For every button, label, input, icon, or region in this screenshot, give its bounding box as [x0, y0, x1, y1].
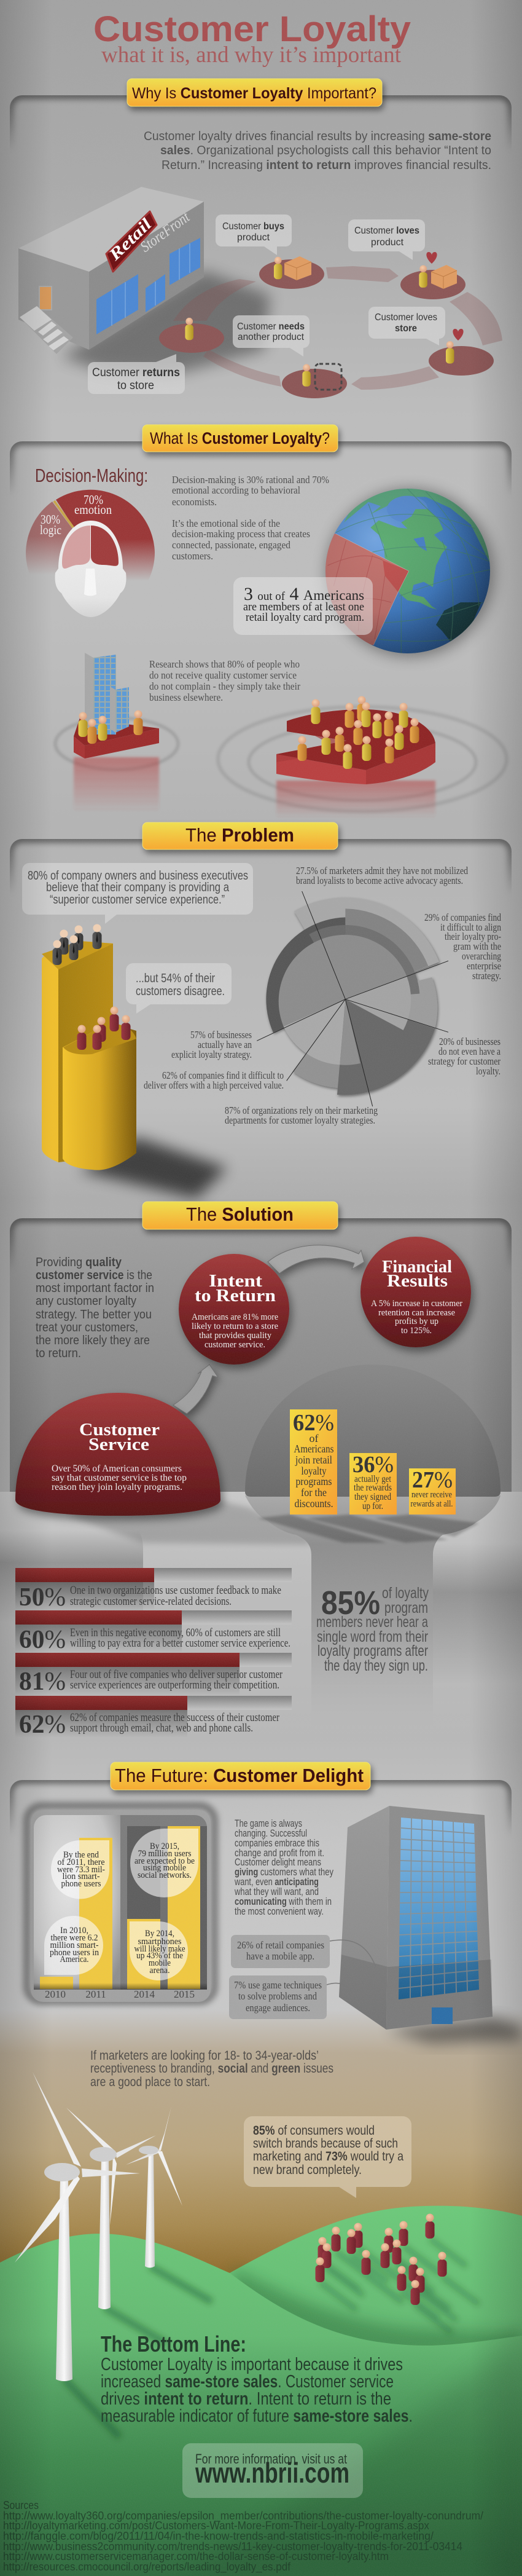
bar: 2011: [79, 1838, 112, 1989]
row: 81 percent: service experiences are outperforming their competition.: [70, 1679, 279, 1692]
panel: the problem frame: [10, 839, 512, 888]
bubble: 2014: will likely make: [134, 1944, 185, 1954]
text: the game is always changing: Customer delight means: [235, 1857, 321, 1868]
circle: financial results: Financial: [382, 1258, 452, 1277]
subtitle: what it is, and why it’s important: [101, 42, 402, 68]
bar: 27 percent: 27%: [412, 1467, 453, 1493]
speech bubble: customer loves store: Customer loves: [375, 312, 437, 323]
text: the game is always changing: changing. Successful: [235, 1828, 307, 1839]
people: [53, 924, 130, 1050]
circle: financial results: profits by up: [395, 1317, 438, 1326]
text: radial chart labels: loyalty.: [476, 1065, 501, 1077]
row: 81 percent: Four out of five companies who deliver superior customer: [70, 1669, 282, 1681]
illustration: crowd on hill: [316, 2214, 479, 2333]
illustration: small pie slice with building: [55, 653, 178, 813]
text: if marketers are looking: receptiveness to branding, social and green issues: [90, 2061, 333, 2076]
bubble: 2010: million smart-: [50, 1940, 99, 1950]
callout: 7 percent game techniques: to solve problems and: [238, 1990, 317, 2002]
speech bubble: 80 percent of owners: “superior customer service experience.”: [50, 893, 225, 907]
text: sources: http://www.customerservicemanager.com/the-dollar-sense-of-customer-loyalty.htm: [3, 2550, 389, 2562]
circle: intent to return: to Return: [195, 1286, 276, 1306]
callout: 3 out of 4 americans: 3 out of 4 Americans: [244, 584, 364, 604]
circle: intent to return: Intent: [209, 1272, 263, 1291]
intro text: Customer loyalty drives financial results by increasing same-store: [144, 130, 491, 143]
axis labels: 2011: [85, 1988, 106, 2000]
title: Customer Loyalty: [93, 9, 411, 49]
illustration: wind turbines: [15, 2072, 212, 2437]
bubble: 2015: By 2015,: [150, 1841, 179, 1851]
callout: 26 percent mobile app: [231, 1935, 376, 1968]
stat: 85 percent of loyalty members: the day they sign up.: [324, 1657, 428, 1674]
row: 50 percent: strategic customer service-related decisions.: [70, 1596, 232, 1608]
bubble: 2010: America.: [60, 1955, 88, 1964]
text: sources: http://www.business2community.com/trends-news/11-key-customer-loyalty-trends-for-2011-03414: [3, 2540, 462, 2553]
text: the bottom line: [101, 2331, 413, 2426]
callout: 7 percent game techniques: engage audiences.: [246, 2002, 310, 2014]
cycle diagram: retail store and customer loop: [18, 187, 502, 398]
text: decision making explanation: customers.: [172, 550, 213, 562]
text: the game is always changing: companies embrace this: [235, 1838, 319, 1849]
icon: retail store building: Retail: [104, 215, 155, 264]
icon: loop arrows: [173, 266, 502, 390]
map: north america: [370, 509, 447, 610]
text: radial chart labels: enterprise: [467, 960, 501, 972]
bar: 27 percent: rewards at all.: [410, 1499, 453, 1509]
icon: retail store building: [18, 187, 204, 354]
keyhole shaped recess: [245, 1365, 501, 1743]
stat: 85 percent of loyalty members: single word from their: [317, 1628, 428, 1645]
bar: 2010: [40, 1977, 73, 1989]
row: 62 percent: 62% of companies measure the success of their customer: [70, 1712, 279, 1724]
speech bubble: 85 percent would switch: switch brands because of such: [253, 2137, 398, 2151]
banner: the solution: The Solution: [186, 1203, 294, 1225]
bar: 62 percent: Americans: [294, 1443, 334, 1455]
speech bubble: customer needs another product: another product: [238, 332, 305, 342]
text: the game is always changing: change and profit from it.: [235, 1848, 324, 1859]
speech bubble: 85 percent would switch: 85% of consumers would: [253, 2124, 375, 2138]
pie labels: [40, 492, 112, 537]
text: sources: Sources: [3, 2499, 39, 2511]
text: radial chart labels: do not even have a: [438, 1046, 501, 1057]
bar: 27 percent: [409, 1467, 456, 1514]
speech bubble: customer buys product: Customer buys: [222, 221, 284, 232]
callout: 3 out of 4 americans: retail loyalty card program.: [246, 611, 364, 624]
text: the game is always changing: comunicating with them in: [235, 1896, 332, 1907]
row: 50 percent: One in two organizations use customer feedback to make: [70, 1585, 281, 1597]
text: decision making explanation: Decision-making is 30% rational and 70%: [172, 474, 329, 486]
bubble: 2014: smartphones: [138, 1937, 182, 1947]
text: decision making explanation: decision-making process that creates: [172, 528, 310, 540]
wedge: 27.5 percent: [294, 897, 439, 999]
text: radial chart labels: overarching: [462, 950, 501, 962]
bubble: 2014: up 43% of the: [136, 1951, 183, 1961]
text: sources: http://www.loyalty360.org/companies/epsilon_member/contributions/the-customer-loyalty-conundrum/: [3, 2510, 483, 2523]
frame shadow: [27, 1806, 214, 2001]
axis labels: 2014: [134, 1988, 155, 2000]
wedge: 57 percent: [266, 917, 345, 1033]
text: sources: [3, 2499, 483, 2574]
title: [93, 9, 411, 68]
bar: 62 percent: loyalty: [301, 1465, 327, 1477]
speech bubble: but 54 percent disagree: ...but 54% of their: [136, 972, 215, 985]
bar: 62 percent: [290, 1409, 337, 1514]
banner: the problem: [142, 822, 338, 849]
text: providing quality customer service: [36, 1255, 154, 1360]
text: providing quality customer service: Providing quality: [36, 1255, 122, 1269]
axis labels: 2015: [174, 1988, 195, 2000]
icon: boxes, hearts and dashed placeholder: [284, 252, 464, 390]
text: the bottom line: increased same-store sales. Customer service: [101, 2372, 394, 2392]
text: the game is always changing: The game is always: [235, 1818, 302, 1829]
banner: why is customer loyalty important: [127, 79, 382, 106]
text: radial chart labels: strategy for customer: [428, 1055, 501, 1067]
bar: 36 percent: [349, 1452, 397, 1514]
text: sources: http://loyaltymarketing.com/post/Customers-Want-More-From-Their-Loyalty-Programs.aspx: [3, 2519, 429, 2532]
text: radial chart labels: 20% of businesses: [439, 1036, 501, 1047]
bubble: 2011: phone users: [61, 1879, 101, 1889]
circle: financial results: A 5% increase in customer: [371, 1299, 462, 1309]
bubble: 2010: there were 6.2: [50, 1933, 98, 1943]
icon: customer figures: [185, 257, 454, 387]
bubble: 2014: By 2014,: [145, 1929, 174, 1939]
bubble: 2015: are expected to be: [134, 1856, 195, 1866]
dome: customer service: Over 50% of American consumers: [52, 1463, 182, 1474]
text: decision making explanation: [172, 474, 329, 562]
text: decision making explanation: connected, passionate, engaged: [172, 539, 290, 551]
text: research shows: do not complain - they simply take their: [149, 680, 300, 692]
chart: decision making pie and head: [26, 465, 155, 617]
arrow: customer service to intent: [173, 1365, 218, 1414]
illustration: yellow cylinder bars with people: [42, 924, 227, 1199]
circle: intent to return: that provides quality: [199, 1331, 272, 1341]
text: radial chart labels: departments for customer loyalty strategies.: [225, 1114, 375, 1126]
circle: financial results: Results: [387, 1272, 448, 1291]
text: sources: http://resources.cmocouncil.org/reports/leading_loyalty_es.pdf: [3, 2561, 291, 2574]
text: radial chart labels: it difficult to align: [440, 921, 501, 933]
map: hudson bay: [413, 537, 427, 551]
chart: radial loyalty statistics: [257, 891, 448, 1106]
speech bubble: customer loves product: Customer loves: [354, 226, 419, 236]
text: decision making explanation: emotional according to behavioral: [172, 484, 300, 496]
turbine 3: [126, 2106, 182, 2268]
bubble: 2011: By the end: [63, 1850, 99, 1860]
banner: the future customer delight: The Future: Customer Delight: [115, 1765, 364, 1786]
text: the game is always changing: giving customers what they: [235, 1867, 334, 1878]
dome: customer service: Service: [88, 1435, 149, 1454]
chart background dark half: [120, 1815, 207, 1990]
call to action: website: [182, 2443, 363, 2498]
banner: the solution: [142, 1202, 338, 1229]
text: research shows: do not receive quality customer service: [149, 669, 297, 681]
bar: 62 percent: 62%: [293, 1410, 334, 1436]
icon: retail store building: StoreFront: [138, 208, 193, 256]
text: if marketers are looking: are a good place to start.: [90, 2074, 210, 2089]
speech bubble: customer loves store: [368, 307, 445, 345]
speech bubble: 85 percent would switch: [244, 2116, 411, 2198]
wedge: 62 percent: [293, 999, 345, 1088]
text: radial chart labels: explicit loyalty strategy.: [171, 1049, 252, 1060]
speech bubble: customer returns to store: to store: [117, 379, 154, 392]
row: 60 percent: 60%: [19, 1626, 66, 1654]
stat: 85 percent of loyalty members: program: [384, 1599, 428, 1617]
tall bar: [42, 941, 113, 1162]
row: 50 percent: 50%: [19, 1583, 66, 1612]
text: radial chart labels: brand loyalists to become active advocacy agents.: [296, 875, 463, 886]
intro text: Return.” Increasing intent to return improves financial results.: [162, 159, 491, 172]
floor shadows under solution section: [0, 1501, 522, 1684]
text: radial chart labels: strategy.: [472, 970, 501, 982]
row: 62 percent: support through email, chat, web and phone calls.: [70, 1722, 253, 1735]
turbine 1: [15, 2072, 140, 2381]
circle: financial results: to 125%.: [401, 1326, 432, 1336]
speech bubble: customer loves product: [348, 219, 425, 260]
speech bubble: customer needs another product: Customer needs: [237, 321, 305, 332]
bar: 62 percent: discounts.: [295, 1497, 333, 1510]
row: 62 percent: 62%: [19, 1711, 66, 1739]
bubble: 2011: [51, 1840, 109, 1899]
callout: 26 percent mobile app: have a mobile app.: [246, 1950, 314, 1962]
bubble: 2011: of 2011, there: [58, 1857, 104, 1867]
illustration: green hills: [0, 2206, 522, 2576]
speech bubble: but 54 percent disagree: customers disagree.: [136, 985, 225, 998]
text: if marketers are looking: If marketers are looking for 18- to 34-year-olds’: [90, 2048, 319, 2063]
row: 50 percent: [15, 1568, 292, 1612]
progress bars: customer service statistics: [15, 1568, 292, 1739]
bar: 62 percent: programs: [296, 1475, 332, 1487]
speech bubble: customer buys product: product: [237, 232, 270, 243]
callout: 3 out of 4 americans: are members of at least one: [243, 601, 364, 613]
icon: head mask with brain: [55, 521, 127, 617]
dome: customer service: reason they join loyalty programs.: [52, 1482, 182, 1492]
row: 62 percent: [15, 1696, 292, 1739]
bar: 36 percent: they signed: [354, 1492, 391, 1502]
wedge: 20 percent: [337, 999, 435, 1095]
stat: 85 percent of loyalty members: loyalty programs after: [317, 1642, 428, 1660]
bubble: 2015: using mobile: [143, 1863, 186, 1873]
circle: intent to return: [179, 1254, 289, 1365]
text: radial chart labels: gram with the: [453, 940, 501, 952]
text: radial chart labels: deliver offers with a high perceived value.: [144, 1079, 284, 1091]
text: providing quality customer service: customer service is the: [36, 1268, 152, 1282]
speech bubble: 85 percent would switch: new brand completely.: [253, 2163, 362, 2177]
bar: 36 percent: 36%: [353, 1452, 394, 1478]
bubble: 2015: social networks.: [138, 1870, 192, 1880]
speech bubble: customer loves store: store: [395, 323, 417, 334]
text: the bottom line: The Bottom Line:: [101, 2331, 246, 2357]
icon: stage discs: [159, 259, 494, 398]
pie labels: logic: [40, 522, 61, 537]
text: radial chart labels: actually have an: [198, 1039, 252, 1050]
turbine 2: [66, 2108, 156, 2309]
building shadow: [61, 270, 270, 375]
bubble: 2014: [130, 1921, 188, 1980]
speech bubble: customer returns to store: [88, 354, 185, 394]
speech bubble: but 54 percent disagree: [126, 963, 232, 1014]
pie labels: 70%: [84, 492, 103, 507]
speech bubble: customer loves product: product: [371, 237, 404, 248]
intro text: [144, 130, 491, 172]
bubble: 2010: phone users in: [50, 1948, 99, 1958]
chart: mobile users bars: [27, 1806, 214, 2002]
text: radial chart labels: 29% of companies find: [424, 912, 502, 923]
callout: 3 out of 4 americans: [233, 577, 373, 635]
speech bubble: 85 percent would switch: marketing and 73% would try a: [253, 2149, 403, 2164]
stat: 85 percent of loyalty members: members never hear a: [316, 1613, 428, 1631]
bar: 36 percent: up for.: [362, 1501, 383, 1511]
shadows: [64, 2266, 212, 2437]
stat: 85 percent of loyalty members: of loyalty: [382, 1585, 429, 1602]
speech bubble: customer buys product: [216, 215, 292, 255]
text: radial chart labels: 87% of organizations rely on their marketing: [225, 1105, 378, 1116]
heading: Decision-Making:: [35, 465, 148, 486]
bar chart: 62 36 27 percent: [290, 1409, 456, 1514]
bubble: 2014: arena.: [150, 1966, 169, 1975]
banner: the problem: The Problem: [185, 824, 294, 846]
call to action: website: For more information, visit us at: [195, 2451, 347, 2467]
text: providing quality customer service: treat your customers,: [36, 1320, 138, 1334]
panel: the future frame: [10, 1780, 512, 1881]
text: providing quality customer service: the more likely they are: [36, 1333, 150, 1347]
text: the game is always changing: [234, 1818, 334, 1917]
bar: 62 percent: for the: [301, 1486, 327, 1499]
pie slices: [26, 490, 155, 599]
text: providing quality customer service: to return.: [36, 1346, 81, 1360]
text: radial chart labels: 62% of companies find it difficult to: [162, 1069, 284, 1081]
speech bubble: 80 percent of owners: 80% of company owners and business executives: [28, 869, 248, 883]
chart: globe with red wedge: [319, 484, 494, 656]
text: decision making explanation: economists.: [172, 496, 217, 508]
text: research shows: [149, 658, 300, 703]
text: providing quality customer service: most important factor in: [36, 1281, 154, 1295]
circle: financial results: [360, 1237, 471, 1347]
text: providing quality customer service: any customer loyalty: [36, 1294, 137, 1308]
map: arctic ocean: [388, 495, 427, 520]
bar: 27 percent: never receive: [411, 1490, 452, 1500]
text: decision making explanation: It’s the emotional side of the: [172, 518, 280, 529]
bar: 36 percent: actually get: [354, 1474, 392, 1484]
stat: 85 percent of loyalty members: [316, 1585, 429, 1674]
bubble: 2014: mobile: [149, 1958, 171, 1968]
banner: why is customer loyalty important: Why Is Customer Loyalty Important?: [132, 85, 376, 102]
row: 60 percent: Even in this negative economy, 60% of customers are still: [70, 1627, 281, 1639]
map: south america: [436, 602, 481, 641]
row: 81 percent: 81%: [19, 1668, 66, 1696]
speech bubble: 80 percent of owners: [22, 863, 253, 924]
bubble: 2010: [44, 1916, 103, 1975]
chart background light half: [34, 1815, 120, 1990]
call to action: website: www.nbrii.com: [195, 2457, 349, 2489]
dome: customer service: say that customer service is the top: [52, 1473, 187, 1483]
text: providing quality customer service: strategy. The better you: [36, 1307, 152, 1321]
pie labels: 30%: [41, 512, 60, 527]
speech bubble: customer needs another product: [233, 315, 310, 356]
row: 81 percent: [15, 1653, 292, 1696]
arrow: intent to financial results: [268, 1245, 364, 1274]
speech bubble: 80 percent of owners: believe that their company is providing a: [46, 881, 230, 894]
text: sources: http://fanggle.com/blog/2011/11/04/in-the-know-trends-and-statistics-in-mobile-marketing/: [3, 2530, 434, 2542]
wedge: 3 of 4: [319, 534, 409, 645]
circle: financial results: retention can increase: [378, 1308, 455, 1318]
circle: intent to return: customer service.: [205, 1340, 265, 1350]
speech bubble: customer returns to store: Customer returns: [92, 366, 180, 379]
illustration: office tower: [339, 1806, 522, 2044]
bar: 2014: [127, 1919, 160, 1989]
bar: 36 percent: the rewards: [354, 1483, 392, 1493]
text: research shows: Research shows that 80% of people who: [149, 658, 300, 670]
intro text: sales. Organizational psychologists call this behavior “Intent to: [160, 144, 491, 157]
row: 60 percent: willing to pay extra for a better customer service experience.: [70, 1637, 290, 1650]
bubble: 2010: In 2010,: [60, 1926, 88, 1936]
panel: the solution: [0, 1218, 522, 1750]
row: 60 percent: [15, 1610, 292, 1654]
illustration: big pie with customers: [218, 696, 507, 819]
shadow: [80, 1137, 227, 1199]
window grid: [399, 1818, 479, 1999]
panel: what is customer loyalty frame: [10, 441, 512, 489]
panel: why is customer loyalty important frame: [10, 95, 512, 143]
short bar: [63, 1023, 136, 1170]
axis labels: [45, 1988, 195, 2000]
bar: 62 percent: join retail: [295, 1454, 332, 1466]
text: radial chart labels: 57% of businesses: [190, 1029, 252, 1041]
dome: customer service: Customer: [79, 1420, 160, 1440]
banner: what is customer loyalty: [142, 425, 338, 452]
bubble: 2015: 79 million users: [138, 1849, 192, 1859]
callout: 26 percent mobile app: 26% of retail companies: [237, 1939, 324, 1951]
text: the game is always changing: the most convenient way.: [235, 1906, 324, 1917]
banner: what is customer loyalty: What Is Customer Loyalty?: [150, 429, 330, 447]
text: the game is always changing: what they will want, and: [234, 1886, 319, 1897]
pie labels: emotion: [74, 502, 112, 517]
bar: 2015: [168, 1826, 200, 1989]
circle: intent to return: Americans are 81% more: [192, 1312, 278, 1322]
text: radial chart labels: 27.5% of marketers admit they have not mobilized: [296, 865, 469, 876]
bubble: 2015: [130, 1829, 198, 1897]
map: northern rim land: [344, 484, 493, 561]
circle: intent to return: likely to return to a store: [192, 1321, 278, 1331]
text: the bottom line: Customer Loyalty is important because it drives: [101, 2355, 403, 2374]
text: radial chart labels: their loyalty pro-: [445, 931, 501, 942]
dome: customer service: [15, 1393, 220, 1516]
text: research shows: business elsewhere.: [149, 691, 223, 703]
inner disc: [279, 935, 407, 1026]
text: the bottom line: drives intent to return. Intent to return is the: [101, 2389, 391, 2409]
text: if marketers are looking: [90, 2048, 333, 2089]
text: the bottom line: measurable indicator of future same-store sales.: [101, 2406, 413, 2426]
bubble: 2011: lion smart-: [63, 1872, 100, 1881]
callout: 7 percent game techniques: [229, 1975, 355, 2019]
stat: 85 percent of loyalty members: 85%: [321, 1585, 380, 1621]
callout: 7 percent game techniques: 7% use game techniques: [234, 1979, 322, 1991]
axis labels: 2010: [45, 1988, 66, 2000]
wedge: 29 percent: [345, 908, 428, 999]
bubble: 2011: were 73.3 mil-: [57, 1865, 105, 1875]
text: the game is always changing: want, even anticipating: [234, 1877, 319, 1888]
bar: 62 percent: of: [310, 1432, 318, 1444]
text: radial chart labels: [144, 865, 502, 1126]
